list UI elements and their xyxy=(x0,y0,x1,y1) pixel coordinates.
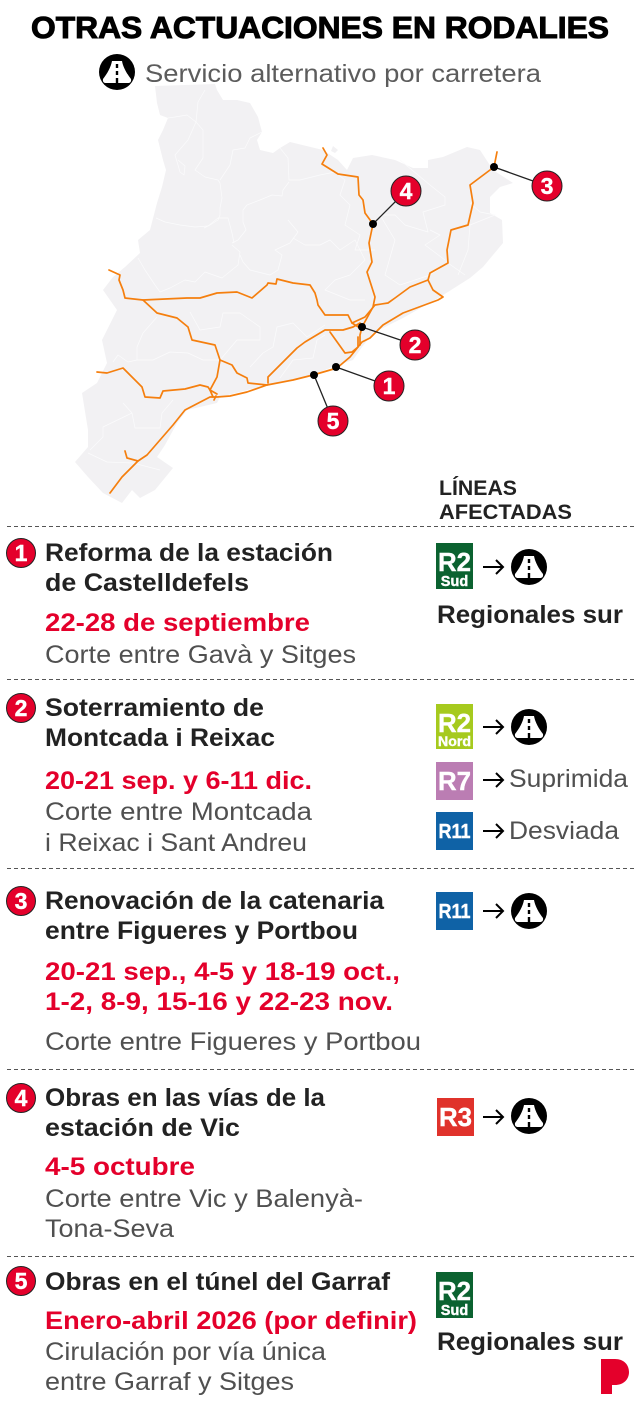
number badge 1: 1 xyxy=(15,540,28,566)
item 2 dates: 20-21 sep. y 6-11 dic. xyxy=(45,767,312,795)
item 1 lines: R2 Sud xyxy=(436,543,547,590)
item 2 lines: R7 xyxy=(436,762,628,800)
item 2 description: i Reixac i Sant Andreu xyxy=(45,829,307,857)
callout 1 xyxy=(332,363,404,401)
item 5 regional note: Regionales sur xyxy=(437,1328,623,1356)
panel: item 4 xyxy=(6,1084,547,1243)
panel: item 3 xyxy=(6,886,547,1056)
item 1 lines: R2 Sud: R2 xyxy=(438,547,471,577)
item 4 dates: 4-5 octubre xyxy=(45,1153,195,1181)
callout 5 xyxy=(310,371,348,436)
item 5 heading: Obras en el túnel del Garraf xyxy=(45,1268,391,1296)
item 1 heading: de Castelldefels xyxy=(45,569,249,597)
item 3 lines: R11: R11 xyxy=(438,901,470,923)
logo xyxy=(601,1359,629,1394)
item 4 description: Corte entre Vic y Balenyà- xyxy=(45,1185,363,1213)
item 2 heading: Soterramiento de xyxy=(45,694,264,722)
item 5 lines: R2 Sud xyxy=(436,1272,473,1319)
item 3 dates: 1-2, 8-9, 15-16 y 22-23 nov. xyxy=(45,988,393,1016)
item 2 lines: R2 Nord xyxy=(436,704,547,749)
callout 4: 4 xyxy=(400,178,413,204)
item 1 dates: 22-28 de septiembre xyxy=(45,609,310,637)
item 2 lines: R11: R11 xyxy=(438,821,470,843)
number badge 4 xyxy=(6,1084,36,1112)
panel: item 1 xyxy=(6,538,623,669)
callout 1: 1 xyxy=(383,373,396,399)
county borders xyxy=(88,90,495,470)
item 3 dates: 20-21 sep., 4-5 y 18-19 oct., xyxy=(45,958,400,986)
number badge 5 xyxy=(6,1266,36,1296)
item 1 lines: R2 Sud: Sud xyxy=(441,574,468,590)
item 2 lines: R11: Desviada xyxy=(509,817,619,845)
callout 2: 2 xyxy=(409,332,421,358)
item 4 heading xyxy=(45,1084,326,1142)
item 2 lines: R7: Suprimida xyxy=(509,765,628,793)
number badge 3: 3 xyxy=(15,888,27,914)
item 4 lines: R3 xyxy=(437,1098,547,1136)
column heading: affected lines: AFECTADAS xyxy=(439,501,572,524)
callout 3: 3 xyxy=(541,173,553,199)
item 1 heading: Reforma de la estación xyxy=(45,539,333,567)
item 4 description: Tona-Seva xyxy=(45,1215,174,1243)
number badge 3 xyxy=(6,886,36,916)
callout 4 xyxy=(369,176,421,228)
column heading: affected lines xyxy=(439,477,572,524)
item 3 heading xyxy=(45,887,385,945)
title: OTRAS ACTUACIONES EN RODALIES xyxy=(31,10,609,45)
item 3 lines: R11 xyxy=(436,892,547,930)
item 5 lines: R2 Sud: R2 xyxy=(438,1276,471,1306)
item 3 heading: entre Figueres y Portbou xyxy=(45,917,358,945)
callout 3 xyxy=(490,163,562,201)
item 2 lines: R7: R7 xyxy=(438,766,471,796)
icon: road xyxy=(99,54,135,90)
number badge 1 xyxy=(6,538,36,568)
land xyxy=(75,84,513,503)
item 1 regional note: Regionales sur xyxy=(437,601,623,629)
panel: item 2 xyxy=(6,694,628,857)
item 5 lines: R2 Sud: Sud xyxy=(441,1303,468,1319)
item 2 description: Corte entre Montcada xyxy=(45,798,312,826)
number badge 4: 4 xyxy=(15,1085,28,1111)
item 1 description: Corte entre Gavà y Sitges xyxy=(45,641,356,669)
item 4 lines: R3: R3 xyxy=(439,1102,472,1132)
item 3 dates xyxy=(45,958,400,1016)
legend: alternative road service xyxy=(99,54,541,90)
item 4 heading: estación de Vic xyxy=(45,1114,240,1142)
item 5 description xyxy=(45,1338,326,1396)
item 2 description xyxy=(45,798,312,857)
callout 5: 5 xyxy=(327,408,340,434)
item 3 description: Corte entre Figueres y Portbou xyxy=(45,1028,421,1056)
item 4 heading: Obras en las vías de la xyxy=(45,1084,326,1112)
rail network xyxy=(97,148,497,493)
column heading: affected lines: LÍNEAS xyxy=(439,477,517,500)
item 5 description: Cirulación por vía única xyxy=(45,1338,326,1366)
number badge 2: 2 xyxy=(15,695,27,721)
number badge 5: 5 xyxy=(15,1268,28,1294)
panel: item 5 xyxy=(6,1266,623,1396)
item 3 heading: Renovación de la catenaria xyxy=(45,887,385,915)
item 2 lines: R2 Nord: R2 xyxy=(438,708,471,738)
number badge 2 xyxy=(6,694,36,722)
item 5 description: entre Garraf y Sitges xyxy=(45,1368,294,1396)
item 2 heading: Montcada i Reixac xyxy=(45,724,275,752)
item 5 dates: Enero-abril 2026 (por definir) xyxy=(45,1307,417,1335)
legend text: Servicio alternativo por carretera xyxy=(145,60,541,88)
map of Catalonia xyxy=(75,84,562,503)
item 1 heading xyxy=(45,539,333,597)
callout 2 xyxy=(358,323,430,360)
item 2 heading xyxy=(45,694,275,752)
item 4 description xyxy=(45,1185,363,1243)
item 2 lines: R11 xyxy=(436,812,619,850)
item 2 lines: R2 Nord: Nord xyxy=(438,733,471,749)
